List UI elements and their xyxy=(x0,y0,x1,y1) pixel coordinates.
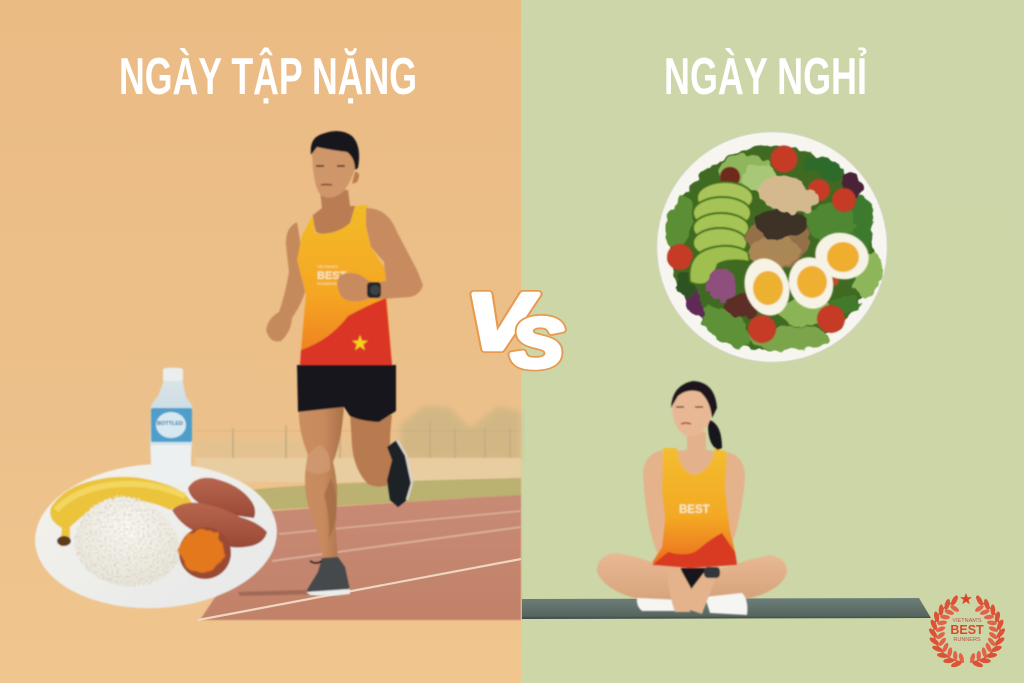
left arm xyxy=(266,222,306,342)
vest xyxy=(652,448,737,568)
plate xyxy=(31,458,281,614)
vest xyxy=(297,205,392,365)
seated woman xyxy=(597,381,787,615)
shorts xyxy=(297,365,396,422)
wreath stems xyxy=(934,602,1000,662)
title: heavy training day: NGÀY TẬP NẶNG xyxy=(119,47,417,106)
VS badge xyxy=(466,276,563,382)
banana xyxy=(50,477,192,546)
laurel wreath left xyxy=(926,594,968,672)
laurel wreath right xyxy=(966,594,1008,672)
avocado slices xyxy=(689,182,753,285)
food plate with banana, rice, sweet potato and water bottle xyxy=(31,368,281,614)
letter S: S xyxy=(511,304,563,382)
logo badge: laurel wreath: VIETNAM'S xyxy=(952,618,982,624)
head xyxy=(311,131,359,198)
purple cabbage xyxy=(707,269,737,301)
neck and chest xyxy=(312,190,368,235)
vest: BEST xyxy=(317,270,347,282)
logo badge: laurel wreath: RUNNERS xyxy=(953,637,981,643)
shorts xyxy=(675,568,712,590)
right arm with watch xyxy=(337,208,423,302)
front leg and shoe xyxy=(299,405,350,596)
bowl xyxy=(657,132,887,362)
water bottle: BOTTLED xyxy=(157,421,183,427)
stadium scene behind runner xyxy=(195,405,521,620)
quinoa xyxy=(725,293,759,319)
running track xyxy=(200,495,521,620)
crossed legs xyxy=(597,553,787,610)
star xyxy=(960,593,972,604)
mixed greens xyxy=(661,146,886,354)
vest: VIETNAM'S xyxy=(317,264,339,269)
rice xyxy=(74,497,179,586)
logo badge: laurel wreath: BEST xyxy=(950,623,984,637)
panel: rest day background xyxy=(521,0,1024,683)
water bottle xyxy=(150,368,192,483)
vest: BEST xyxy=(679,504,710,516)
nuts xyxy=(755,170,821,220)
boiled eggs xyxy=(738,227,874,321)
letter V fill: V xyxy=(466,276,538,366)
head with ponytail xyxy=(671,381,722,450)
tomatoes xyxy=(667,146,856,343)
watch xyxy=(704,567,720,578)
seeds xyxy=(747,209,809,270)
socks xyxy=(637,593,747,615)
arms and hands xyxy=(643,450,745,614)
sweet potatoes xyxy=(172,478,267,579)
panel: heavy training day background xyxy=(0,0,521,683)
title: rest day: NGÀY NGHỈ xyxy=(664,47,867,106)
salad bowl xyxy=(657,132,887,362)
yoga mat xyxy=(522,598,931,619)
letter V: V xyxy=(466,276,538,366)
logo badge: laurel wreath xyxy=(926,593,1008,672)
letter S fill: S xyxy=(511,304,563,382)
torso and neck xyxy=(662,432,726,490)
rear leg and shoe xyxy=(350,412,412,507)
runner xyxy=(266,131,423,596)
vest: RUNNERS xyxy=(317,281,337,286)
